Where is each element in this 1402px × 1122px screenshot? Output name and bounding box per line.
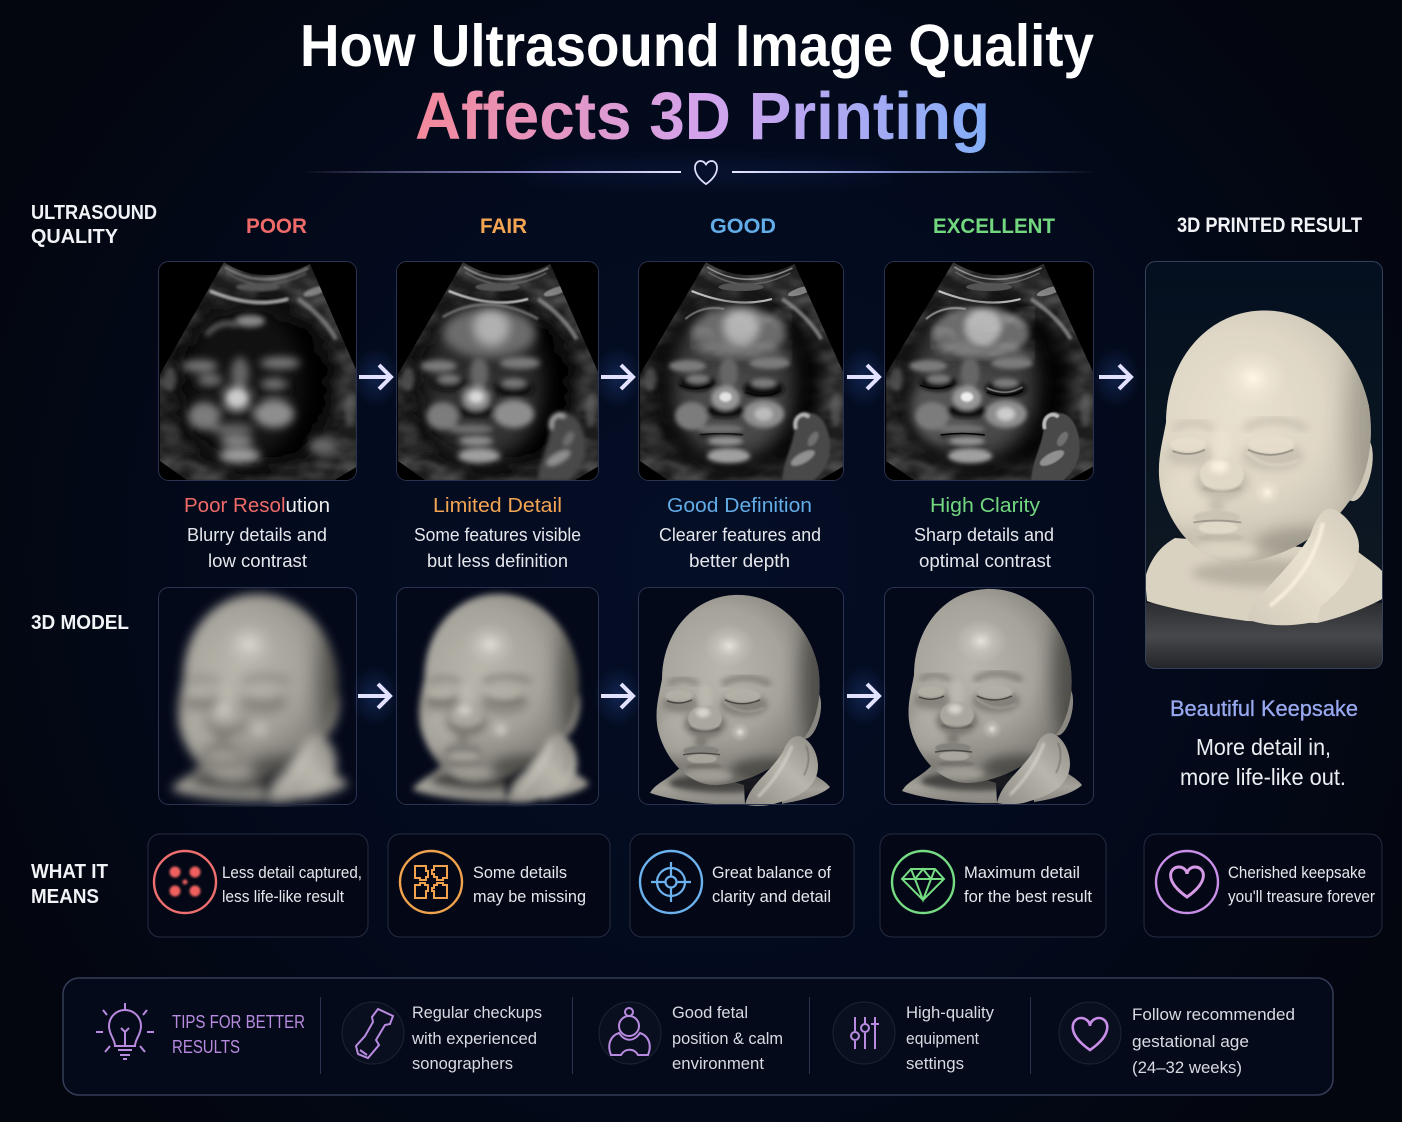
keepsake text: More detail in,: [1196, 734, 1331, 760]
caption: excellent: Sharp details and: [914, 524, 1054, 545]
keepsake text: [1170, 696, 1358, 790]
column headers: 3D PRINTED RESULT: [1177, 214, 1362, 237]
title: How Ultrasound Image Quality: [300, 13, 1094, 79]
tip: fetal position: Good fetal: [672, 1003, 748, 1022]
tip: regular checkups: [342, 1002, 542, 1073]
caption: fair: but less definition: [427, 550, 568, 571]
tip: gestational age: [1059, 1002, 1295, 1077]
meaning card: keepsake: Cherished keepsake: [1228, 864, 1366, 882]
column headers: EXCELLENT: [933, 215, 1055, 238]
caption: good: Clearer features and: [659, 524, 821, 545]
model panel: excellent: [884, 587, 1096, 805]
arrows: ultrasound row: [352, 347, 1140, 407]
meaning card: excellent: for the best result: [964, 888, 1092, 906]
printed hand: [1247, 509, 1359, 625]
row label: 3D model: 3D MODEL: [31, 612, 129, 634]
tip: equipment settings: equipment: [906, 1029, 979, 1048]
caption: poor: low contrast: [208, 550, 307, 571]
caption: poor: [184, 495, 330, 571]
ultrasound panel: excellent: [884, 261, 1094, 481]
ultrasound panel: good: [638, 261, 844, 481]
keepsake text: more life-like out.: [1180, 764, 1346, 790]
tip: equipment settings: settings: [906, 1054, 964, 1073]
panel: tips for better results: [63, 978, 1333, 1095]
arrows: model row: [351, 666, 888, 726]
title divider with heart: [300, 160, 1097, 184]
meaning card: poor: Less detail captured,: [222, 864, 362, 882]
meaning card: excellent: Maximum detail: [964, 864, 1080, 882]
title: Affects 3D Printing: [415, 79, 990, 154]
meaning card: poor: [148, 834, 368, 937]
caption: fair: [414, 495, 581, 571]
tip: equipment settings: [833, 1002, 994, 1073]
tip: regular checkups: with experienced: [411, 1029, 537, 1048]
icon: puzzle pieces: [400, 851, 462, 913]
row label: ultrasound quality: QUALITY: [31, 226, 119, 248]
caption: fair: Some features visible: [414, 524, 581, 545]
caption: excellent: [914, 495, 1054, 571]
tip: fetal position: position & calm: [672, 1029, 783, 1048]
meaning card: fair: [388, 834, 610, 937]
tip: regular checkups: Regular checkups: [412, 1003, 542, 1022]
tips heading: RESULTS: [172, 1037, 240, 1057]
model panel: poor: [154, 587, 362, 805]
caption: good: Good Definition: [667, 495, 812, 517]
tip: fetal position: environment: [672, 1054, 764, 1073]
meaning card: keepsake: [1144, 834, 1382, 937]
meaning card: keepsake: you'll treasure forever: [1228, 888, 1375, 906]
ultrasound panel: poor: [158, 261, 358, 481]
tip: gestational age: Follow recommended: [1132, 1005, 1295, 1024]
icon: diamond: [892, 851, 954, 913]
row label: what it means: WHAT IT: [31, 861, 108, 883]
tip: gestational age: (24–32 weeks): [1132, 1058, 1242, 1077]
meaning card: fair: may be missing: [473, 888, 586, 906]
meaning card: good: clarity and detail: [712, 888, 831, 906]
tip: fetal position: [599, 1002, 783, 1073]
row label: what it means: MEANS: [31, 886, 99, 908]
caption: good: [659, 495, 821, 571]
icon: heart: [1156, 851, 1218, 913]
caption: good: better depth: [689, 550, 790, 571]
title: [300, 13, 1094, 154]
model panel: fair: [395, 587, 603, 805]
model panel: good: [632, 587, 844, 807]
tips heading: TIPS FOR BETTER: [172, 1012, 305, 1032]
caption: poor: Blurry details and: [187, 524, 327, 545]
tip: regular checkups: sonographers: [412, 1054, 513, 1073]
caption: poor: Poor Resolution: [184, 495, 330, 517]
meaning card: good: Great balance of: [712, 864, 831, 882]
captions under ultrasound panels: [184, 495, 1054, 571]
caption: fair: Limited Detail: [433, 495, 562, 517]
column headers: POOR: [246, 215, 307, 238]
icon: light bulb: [96, 1003, 154, 1059]
caption: excellent: High Clarity: [930, 495, 1040, 517]
meaning card: excellent: [880, 834, 1106, 937]
row label: ultrasound quality: [31, 202, 157, 248]
column headers: FAIR: [480, 215, 527, 238]
meaning card: good: [630, 834, 854, 937]
icon: target: [640, 851, 702, 913]
keepsake text: Beautiful Keepsake: [1170, 696, 1358, 721]
ultrasound panel: fair: [396, 261, 599, 481]
meaning card: fair: Some details: [473, 864, 567, 882]
tips heading: [172, 1012, 305, 1057]
caption: excellent: optimal contrast: [919, 550, 1051, 571]
tip: gestational age: gestational age: [1132, 1032, 1249, 1051]
icon: scattered dots: [154, 851, 216, 913]
tip: equipment settings: High-quality: [906, 1003, 994, 1022]
column headers: [246, 214, 1362, 238]
column headers: GOOD: [710, 215, 776, 238]
row label: ultrasound quality: ULTRASOUND: [31, 202, 157, 224]
panel: 3D printed result: [1145, 261, 1383, 669]
meaning card: poor: less life-like result: [222, 888, 344, 906]
row label: what it means: [31, 861, 108, 908]
